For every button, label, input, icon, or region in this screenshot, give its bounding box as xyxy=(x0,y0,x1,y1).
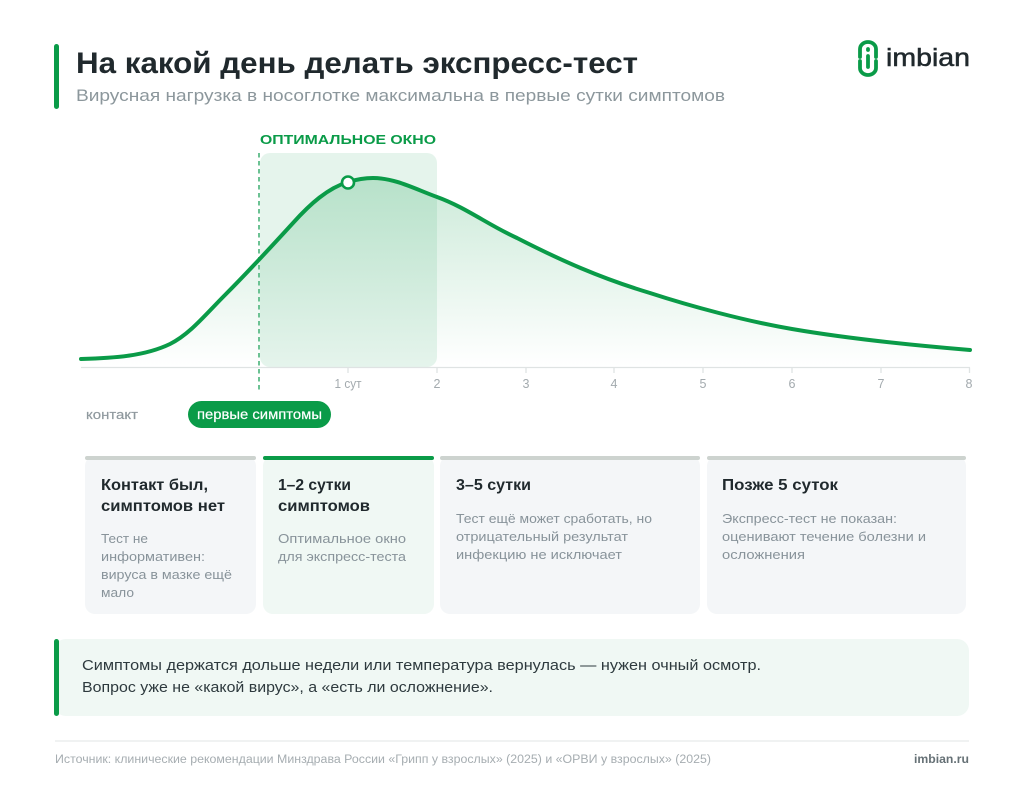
panel: after 5 days xyxy=(707,456,966,614)
callout text: Вопрос уже не «какой вирус», а «есть ли осложнение». xyxy=(82,680,493,696)
subtitle: Вирусная нагрузка в носоглотке максимальна в первые сутки симптомов xyxy=(76,86,725,105)
card heading xyxy=(278,477,370,515)
card body: для экспресс-теста xyxy=(278,549,407,564)
header accent bar xyxy=(54,44,59,109)
card body xyxy=(278,531,407,564)
panel: days 3-5 xyxy=(440,456,700,614)
axis labels: 8 xyxy=(966,377,973,391)
callout text: Симптомы держатся дольше недели или температура вернулась — нужен очный осмотр. xyxy=(82,658,761,674)
card body: вируса в мазке ещё xyxy=(101,567,232,582)
card heading xyxy=(101,477,225,515)
axis labels: 5 xyxy=(700,377,707,391)
card body xyxy=(456,511,652,562)
axis labels: 4 xyxy=(611,377,618,391)
footer xyxy=(55,741,969,766)
source text: Источник: клинические рекомендации Минздрава России «Грипп у взрослых» (2025) и «ОРВИ у взрослых» (2025) xyxy=(55,754,711,766)
card body: инфекцию не исключает xyxy=(456,547,622,562)
header xyxy=(54,44,725,109)
label pill: first symptoms xyxy=(188,401,331,428)
axis labels: 6 xyxy=(789,377,796,391)
card heading: симптомов нет xyxy=(101,498,225,515)
panel: contact, no symptoms xyxy=(85,456,256,614)
label pill: first symptoms: первые симптомы xyxy=(197,407,322,422)
area under curve xyxy=(81,178,970,367)
card heading: 1–2 сутки xyxy=(278,477,351,494)
card heading: 3–5 сутки xyxy=(456,477,531,494)
callout text xyxy=(82,658,761,696)
optimal window label: ОПТИМАЛЬНОЕ ОКНО xyxy=(260,132,436,147)
card body: отрицательный результат xyxy=(456,529,628,544)
icon: paperclip xyxy=(860,42,876,75)
card body: Оптимальное окно xyxy=(278,531,406,546)
logo wordmark: imbian xyxy=(886,44,970,72)
axis labels: 1 сут xyxy=(334,377,362,391)
card body xyxy=(101,531,232,600)
chart: viral load curve xyxy=(81,132,973,428)
card body xyxy=(722,511,926,562)
title: На какой день делать экспресс-тест xyxy=(76,47,638,80)
card body: Тест не xyxy=(101,531,148,546)
callout xyxy=(54,639,969,716)
peak marker xyxy=(342,176,354,188)
axis labels: 7 xyxy=(878,377,885,391)
axis line xyxy=(81,368,970,373)
card heading: Позже 5 суток xyxy=(722,477,838,494)
axis labels: 3 xyxy=(523,377,530,391)
site link text: imbian.ru xyxy=(914,752,969,766)
card body: осложнения xyxy=(722,547,805,562)
card body: мало xyxy=(101,585,134,600)
axis labels xyxy=(334,377,973,391)
panel: days 1-2 of symptoms xyxy=(263,456,434,614)
card body: Тест ещё может сработать, но xyxy=(456,511,652,526)
axis labels: 2 xyxy=(434,377,441,391)
card heading: симптомов xyxy=(278,498,370,515)
curve line xyxy=(81,178,970,359)
label: contact: контакт xyxy=(86,407,138,422)
card body: оценивают течение болезни и xyxy=(722,529,926,544)
card body: Экспресс-тест не показан: xyxy=(722,511,897,526)
logo: imbian xyxy=(860,42,970,75)
symptom onset dashed line xyxy=(258,153,260,393)
card heading: Контакт был, xyxy=(101,477,208,494)
card body: информативен: xyxy=(101,549,205,564)
optimal window band xyxy=(260,153,437,367)
